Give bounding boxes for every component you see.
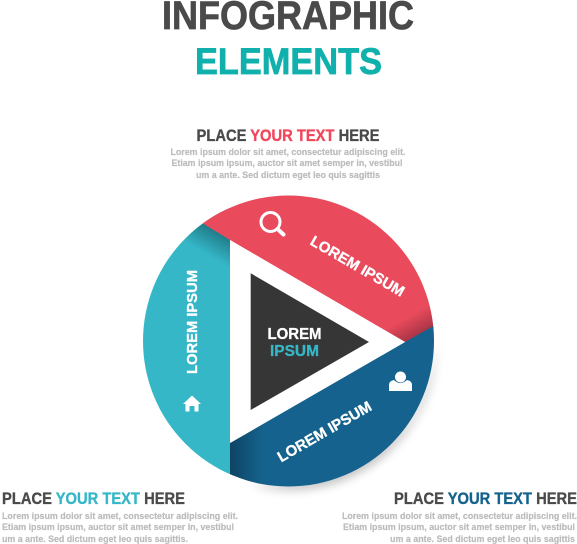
- text block: top: Lorem ipsum dolor sit amet, consectetur adipiscing elit.: [170, 147, 406, 157]
- circle shadow: [250, 345, 436, 490]
- label: teal: LOREM IPSUM: [184, 270, 201, 374]
- dark triangle: [251, 273, 369, 410]
- text block: bottom left: PLACE YOUR TEXT HERE: [2, 490, 185, 508]
- text block: top: Etiam ipsum ipsum, auctor sit amet semper in, vestibul: [172, 158, 402, 168]
- text block: bottom right: um a ante. Sed dictum eget leo quis sagittis: [390, 534, 575, 544]
- text block: top: [170, 127, 406, 180]
- center label: IPSUM: [270, 343, 319, 360]
- text block: top: um a ante. Sed dictum eget leo quis sagittis: [196, 170, 380, 180]
- icon: magnifier: [261, 212, 284, 234]
- title: [162, 0, 414, 82]
- text block: bottom left: um a ante. Sed dictum eget leo quis sagittis.: [2, 534, 188, 544]
- center label: [268, 326, 322, 360]
- text block: bottom right: [342, 490, 577, 544]
- white triangle: [230, 240, 405, 443]
- title: ELEMENTS: [195, 41, 382, 82]
- text block: bottom right: Etiam ipsum ipsum, auctor sit amet semper in, vestibul: [343, 522, 575, 532]
- icon: user: [389, 372, 412, 391]
- center label: LOREM: [268, 326, 322, 343]
- segment: teal: [143, 208, 230, 474]
- text block: bottom left: Etiam ipsum ipsum, auctor sit amet semper in, vestibul: [2, 522, 234, 532]
- text block: top: PLACE YOUR TEXT HERE: [196, 127, 380, 145]
- icon: home: [183, 396, 201, 412]
- segment: red: [202, 196, 434, 342]
- pie chart: [143, 196, 434, 486]
- segment: blue: [230, 326, 434, 486]
- label: blue: LOREM IPSUM: [275, 398, 375, 466]
- text block: bottom right: PLACE YOUR TEXT HERE: [394, 490, 577, 508]
- text block: bottom left: [2, 490, 238, 544]
- text block: bottom left: Lorem ipsum dolor sit amet, consectetur adipiscing elit.: [2, 511, 238, 521]
- label: red: LOREM IPSUM: [307, 233, 407, 300]
